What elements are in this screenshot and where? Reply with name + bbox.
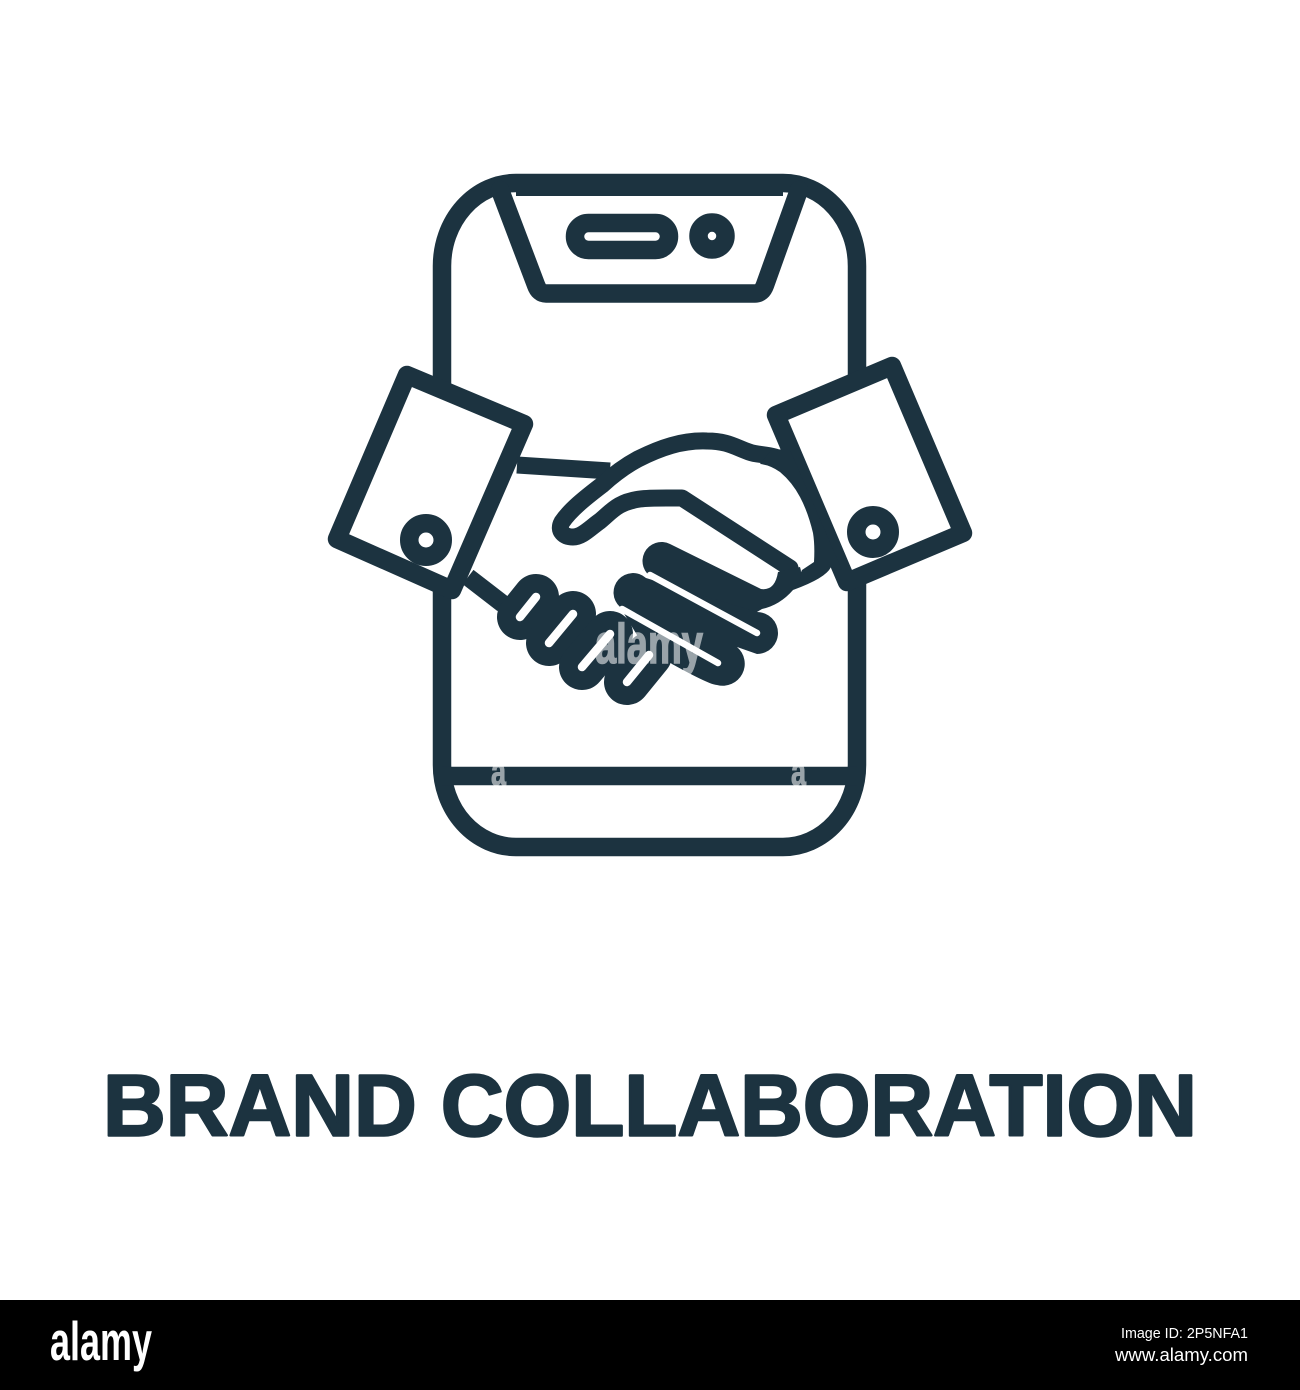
footer url: www.alamy.com	[1114, 1345, 1248, 1365]
title: BRAND COLLABORATION	[103, 1058, 1197, 1154]
watermark: letter a left on phone bar: a	[491, 750, 507, 794]
watermark: alamy over handshake: alamy	[595, 612, 703, 675]
icon: white finger gaps	[520, 575, 757, 682]
icon: right shirt cuff	[776, 366, 963, 582]
icon: left shirt cuff	[337, 375, 524, 590]
icon: right hand outline with thumb	[517, 441, 842, 590]
icon: brand collaboration phone with handshake	[337, 183, 963, 847]
icon: right hand fingers	[614, 542, 801, 686]
watermark: letter a right on phone bar: a	[791, 750, 807, 794]
icon: smartphone body	[442, 183, 857, 847]
icon: phone notch with speaker and camera	[500, 190, 799, 294]
icon: left hand wrist and fingers	[468, 577, 649, 682]
footer logo: alamy	[50, 1310, 152, 1372]
footer image id: Image ID: 2P5NFA1	[1121, 1325, 1248, 1342]
footer bar	[0, 1300, 1300, 1390]
